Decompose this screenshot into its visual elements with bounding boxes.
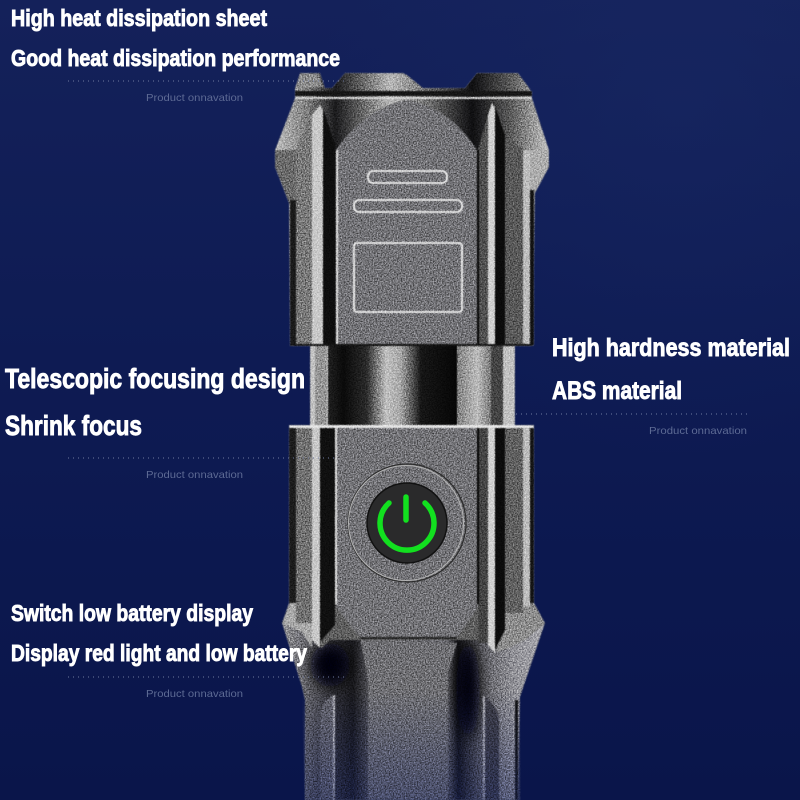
callout: low battery display xyxy=(11,600,345,700)
callout: low battery display: Switch low battery display xyxy=(11,600,253,626)
callout: heat dissipation: Good heat dissipation performance xyxy=(11,45,340,71)
embossed slot 2 xyxy=(354,200,462,212)
left rib xyxy=(289,428,335,648)
left rib xyxy=(296,105,335,345)
callout: heat dissipation: High heat dissipation sheet xyxy=(11,5,267,31)
callout: telescopic focusing: Telescopic focusing design xyxy=(5,363,305,394)
callout: telescopic focusing xyxy=(5,363,335,481)
crown highlights xyxy=(297,74,323,87)
flashlight tail xyxy=(282,600,545,800)
embossed rectangle xyxy=(354,243,462,312)
lower center panel xyxy=(336,428,478,638)
head groove xyxy=(295,91,532,96)
flashlight body xyxy=(275,73,549,800)
embossed slot 1 xyxy=(368,171,447,183)
flashlight lower body xyxy=(282,425,545,653)
flashlight head xyxy=(275,73,549,346)
flashlight neck xyxy=(310,340,515,430)
right rib xyxy=(478,428,534,653)
callout: telescopic focusing: Shrink focus xyxy=(5,410,142,441)
right rib xyxy=(478,103,534,345)
callout: low battery display: Display red light and low battery xyxy=(11,640,307,666)
icon: power button xyxy=(348,464,466,582)
callout: hardness material: ABS material xyxy=(552,377,682,405)
head center panel xyxy=(336,100,477,345)
callout: telescopic focusing: Product onnavation xyxy=(146,469,243,481)
callout: hardness material xyxy=(516,334,790,437)
flashlight xyxy=(275,73,549,800)
callout: hardness material: Product onnavation xyxy=(649,425,747,437)
callout: heat dissipation: Product onnavation xyxy=(146,92,243,104)
callout: heat dissipation xyxy=(11,5,345,104)
callout: low battery display: Product onnavation xyxy=(146,688,243,700)
